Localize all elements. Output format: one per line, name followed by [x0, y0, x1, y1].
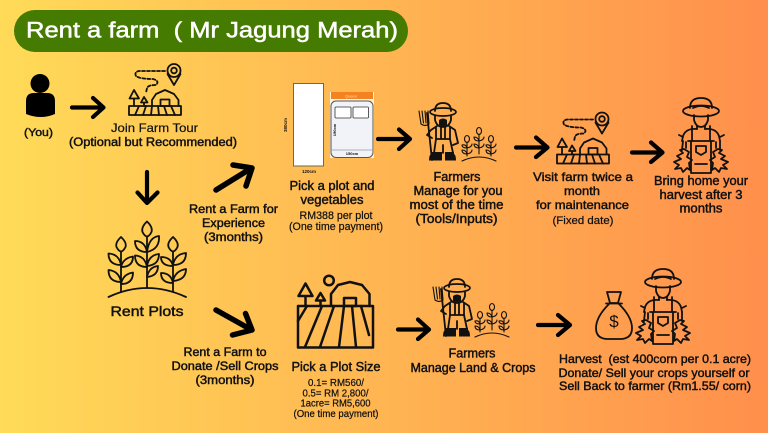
panel: plot and bed diagram: 190cm — [332, 123, 337, 136]
title — [14, 10, 408, 52]
panel: plot and bed diagram: Queen — [345, 94, 357, 98]
icon: money bag — [596, 292, 632, 339]
text: join farm tour: Join Farm Tour — [111, 121, 198, 135]
text: pick a plot size: 0.1= RM560/ — [308, 378, 364, 389]
icon: wheat plants — [108, 222, 186, 297]
icon: farm tour — [129, 64, 181, 115]
text: pick a plot size — [292, 359, 380, 420]
text: harvest options: Harvest (est 400corn per 0.1 acre) — [559, 352, 751, 366]
icon: farmer with rake, lower row — [433, 279, 472, 336]
text: visit farm twice a month: for maintenance — [536, 198, 629, 212]
panel: plot and bed diagram: 150cm — [346, 151, 359, 156]
text: pick a plot and vegetables: (One time payment) — [289, 221, 383, 233]
text: rent a farm to donate or sell crops: Rent a Farm to — [184, 347, 266, 359]
arrow: farmers to visit — [516, 138, 548, 157]
panel: plot and bed diagram — [283, 84, 374, 174]
text: rent a farm to donate or sell crops — [172, 347, 279, 387]
text: pick a plot and vegetables: vegetables — [300, 192, 364, 207]
text: bring home your harvest: harvest after 3 — [660, 188, 743, 202]
text: visit farm twice a month — [533, 170, 633, 227]
arrow: plot to farmers — [378, 130, 410, 149]
arrow: up right to experience — [216, 165, 252, 190]
text: rent a farm for experience: Rent a Farm for — [189, 204, 278, 216]
text: pick a plot and vegetables: Pick a plot and — [290, 178, 374, 193]
icon: farm field — [298, 276, 373, 348]
text: rent a farm to donate or sell crops: (3months) — [196, 375, 255, 387]
arrow: down to rent plots — [138, 172, 158, 203]
text: farmers manage land and crops — [410, 346, 536, 375]
text: visit farm twice a month: month — [564, 184, 600, 198]
text: pick a plot size: 0.5= RM 2,800/ — [302, 388, 369, 400]
icon: farmer with rake — [419, 103, 458, 160]
arrow: plot size to farmers — [398, 320, 429, 339]
label: rent plots: Rent Plots — [110, 303, 184, 319]
panel: plot and bed diagram: 380cm — [283, 118, 288, 132]
text: pick a plot size: 1acre= RM5,600 — [300, 398, 371, 410]
text: rent a farm for experience: Experience — [202, 218, 265, 230]
text: harvest options — [558, 352, 751, 393]
text: pick a plot size: Pick a Plot Size — [292, 359, 380, 374]
text: rent a farm to donate or sell crops: Donate /Sell Crops — [172, 361, 279, 373]
arrow: farmers to harvest — [538, 315, 570, 335]
text: farmers manage for you — [410, 170, 504, 226]
label: you: (You) — [24, 127, 53, 139]
text: rent a farm for experience: (3months) — [204, 232, 263, 244]
text: farmers manage land and crops: Manage Land & Crops — [410, 361, 536, 375]
text: harvest options: Donate/ Sell your crops yourself or — [558, 366, 750, 380]
icon: crops beside farmer — [462, 128, 496, 161]
arrow: down right to donate or sell — [216, 310, 252, 335]
text: farmers manage for you: most of the time — [410, 198, 504, 212]
icon: person — [26, 74, 55, 117]
text: bring home your harvest: Bring home your — [654, 174, 748, 188]
text: bring home your harvest — [654, 174, 748, 216]
text: bring home your harvest: months — [680, 202, 722, 216]
panel: plot and bed diagram: 120cm — [302, 169, 316, 174]
icon: crops beside farmer, lower row — [475, 304, 509, 337]
title: Rent a farm ( Mr Jagung Merah) — [26, 18, 398, 42]
text: harvest options: Sell Back to farmer (Rm1.55/ corn) — [559, 379, 751, 393]
text: join farm tour: (Optional but Recommended) — [69, 137, 237, 149]
text: farmers manage for you: Manage for you — [414, 184, 503, 198]
text: pick a plot and vegetables — [289, 178, 383, 233]
text: farmers manage for you: (Tools/Inputs) — [416, 212, 498, 226]
text: visit farm twice a month: Visit farm twice a — [533, 170, 633, 184]
icon: harvester, lower row — [636, 269, 690, 344]
arrow: visit to bring home — [632, 142, 662, 162]
icon: harvester with crops — [674, 98, 728, 173]
text: pick a plot size: (One time payment) — [294, 409, 378, 420]
text: rent a farm for experience — [189, 204, 278, 244]
text: join farm tour — [69, 121, 237, 149]
text: farmers manage land and crops: Farmers — [448, 346, 496, 360]
icon: money bag: $ — [609, 312, 619, 331]
text: pick a plot and vegetables: RM388 per plot — [300, 210, 372, 222]
text: farmers manage for you: Farmers — [434, 170, 480, 184]
text: visit farm twice a month: (Fixed date) — [552, 215, 614, 227]
arrow: you to farm tour — [72, 98, 104, 117]
icon: visit farm — [557, 112, 609, 164]
